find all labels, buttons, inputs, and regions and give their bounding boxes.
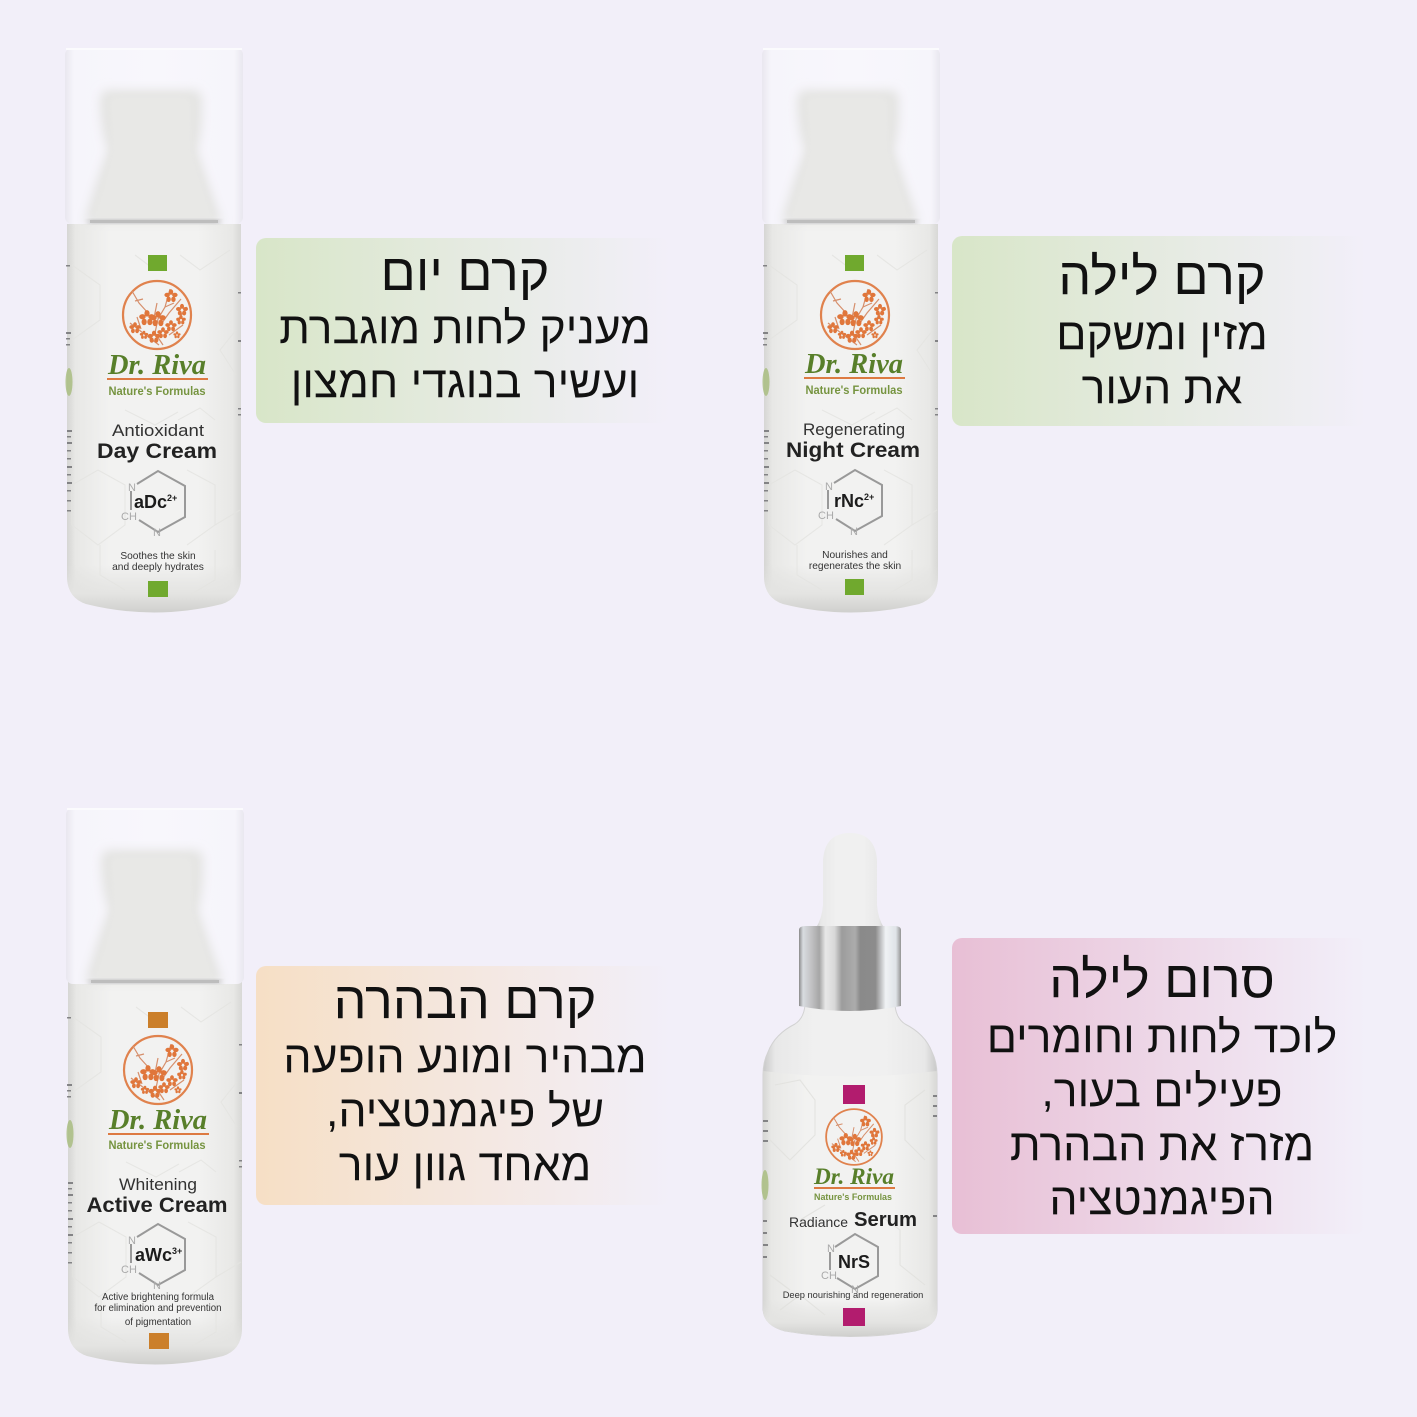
product name: Night Cream [786,439,920,462]
icon: molecule badge aWc [121,1224,185,1292]
bottom color square [845,579,864,595]
product name [86,1175,228,1217]
icon: blossom logo [826,1109,882,1165]
brand name [108,1105,209,1152]
description: night serum: מזרז את הבהרת [1010,1121,1314,1170]
brand name: Dr. Riva [804,349,903,380]
product: night cream bottle [762,48,940,612]
brand name: Nature's Formulas [108,386,206,398]
icon: molecule badge rNc [818,470,882,538]
product: serum dropper bottle [762,833,937,1336]
icon: blossom logo [821,281,889,349]
icon: molecule badge NrS [821,1234,878,1296]
top color square [845,255,864,271]
icon: molecule badge NrS: NrS [838,1252,870,1272]
icon: molecule badge NrS: N [851,1284,859,1296]
panel background: day cream [256,238,670,423]
brand name: Nature's Formulas [806,385,902,397]
icon: blossom logo [124,1036,192,1104]
icon: blossom logo [123,281,191,349]
benefit text: Deep nourishing and regeneration [783,1290,923,1300]
icon: molecule badge NrS: N [827,1243,835,1255]
icon: molecule badge aDc: N [153,527,161,539]
benefit text: Active brightening formula [102,1292,215,1303]
bottle label area [763,1071,937,1336]
product name [786,420,920,462]
product name: Regenerating [803,420,905,439]
product name [97,421,217,463]
bottom color square [843,1308,865,1326]
description: whitening cream [283,1033,647,1190]
top color square [148,255,167,271]
bottom color square [148,581,168,597]
description: night serum: לוכד לחות וחומרים [987,1013,1337,1062]
icon: molecule badge aDc [121,471,185,539]
icon: molecule badge aWc: CH [121,1264,137,1276]
panel background: night cream [952,236,1366,426]
description: day cream: ועשיר בנוגדי חמצון [291,358,639,407]
brand name: Dr. Riva [107,350,206,381]
product: whitening cream bottle [66,808,244,1364]
icon: molecule badge aDc: aDc [134,492,167,512]
product name: Day Cream [97,440,217,463]
description: day cream: מעניק לחות מוגברת [279,304,651,353]
icon: molecule badge aDc: 2+ [167,493,177,503]
panel: night serum [952,938,1366,1234]
brand name [813,1164,895,1203]
icon: molecule badge aWc: N [153,1280,161,1292]
icon: molecule badge aWc: N [128,1235,136,1247]
panel background: night serum [952,938,1366,1234]
benefit text: for elimination and prevention [94,1303,222,1314]
brand name: Dr. Riva [813,1164,894,1189]
panel: day cream [256,238,670,423]
benefit text: of pigmentation [125,1317,191,1328]
icon: molecule badge rNc: N [850,526,858,538]
benefit text [94,1292,222,1328]
panel: night cream [952,236,1366,426]
benefit text [809,550,901,572]
product name: Active Cream [86,1194,228,1217]
icon: molecule badge NrS: CH [821,1270,837,1282]
description: night serum: הפיגמנטציה [1049,1175,1275,1224]
silver collar [799,926,901,1011]
product name: Radiance [789,1214,848,1230]
top color square [148,1012,168,1028]
icon: molecule badge aDc: N [128,482,136,494]
icon: molecule badge rNc: 2+ [864,492,874,502]
heading: whitening cream: קרם הבהרה [334,972,596,1030]
brand name [804,349,905,397]
icon: molecule badge aWc: aWc [135,1245,172,1265]
icon: molecule badge aWc: 3+ [172,1246,182,1256]
bottle body [763,1005,937,1336]
description: whitening cream: מאחד גוון עור [339,1141,591,1190]
heading: night cream: קרם לילה [1058,248,1266,306]
description: day cream [279,304,651,407]
product name: Antioxidant [112,421,204,440]
benefit text: Nourishes and [822,550,888,561]
description: night cream: את העור [1082,364,1242,413]
icon: molecule badge aDc: CH [121,511,137,523]
description: whitening cream: מבהיר ומונע הופעה [283,1033,647,1082]
brand name [107,350,208,398]
product name [789,1209,917,1231]
product name: Whitening [119,1175,197,1194]
benefit text: Soothes the skin [120,551,196,562]
top color square [843,1085,865,1104]
brand name: Dr. Riva [108,1105,207,1136]
dropper bulb [816,833,884,928]
benefit text: regenerates the skin [809,561,901,572]
description: night serum: פעילים בעור, [1041,1067,1283,1116]
benefit text [112,551,204,573]
benefit text: and deeply hydrates [112,562,204,573]
product name: Serum [854,1209,917,1231]
heading: night serum: סרום לילה [1049,951,1275,1009]
product: day cream bottle [65,48,243,612]
description: night cream [1056,310,1268,413]
icon: molecule badge rNc: CH [818,510,834,522]
description: night serum [987,1013,1337,1224]
icon: molecule badge rNc: rNc [834,491,864,511]
panel: whitening cream [256,966,670,1205]
heading: day cream: קרם יום [381,244,549,302]
description: night cream: מזין ומשקם [1056,310,1268,359]
description: whitening cream: של פיגמנטציה, [326,1087,604,1136]
brand name: Nature's Formulas [108,1140,206,1152]
icon: molecule badge rNc: N [825,481,833,493]
panel background: whitening cream [256,966,670,1205]
brand name: Nature's Formulas [814,1192,892,1203]
bottom color square [149,1333,169,1349]
